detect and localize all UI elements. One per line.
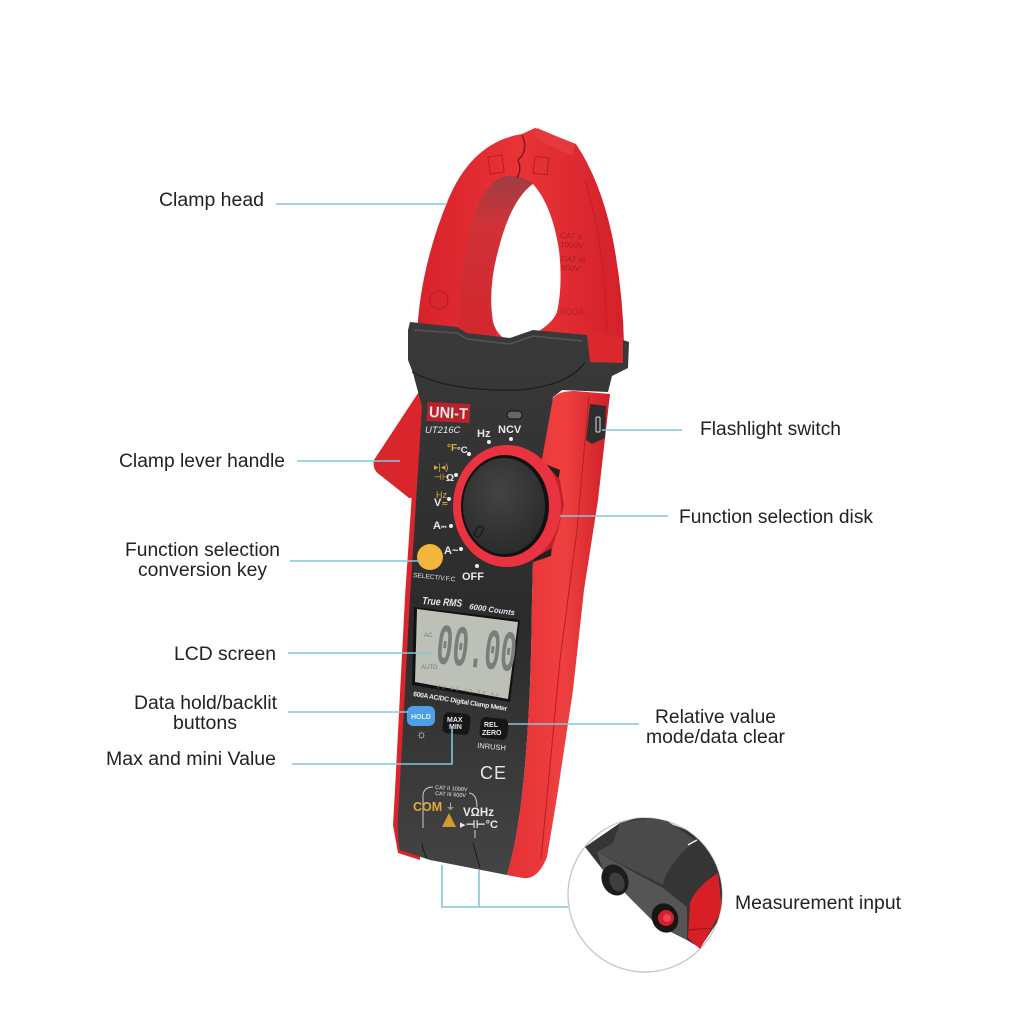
brand logo: UNI-T <box>429 404 469 423</box>
LCD screen <box>412 607 520 702</box>
clamp head jaws <box>417 128 624 362</box>
LCD screen: AUTO <box>421 665 438 671</box>
leader line: relative value <box>508 723 639 725</box>
label: max and mini value: Max and mini Value <box>106 749 276 770</box>
jaw markings: CAT II <box>560 231 582 242</box>
label: data hold backlit buttons: Data hold/backlit <box>134 693 278 714</box>
dial labels: V≂ <box>434 497 448 509</box>
label: function selection conversion key: conversion key <box>138 560 268 581</box>
model label: UT216C <box>425 425 461 436</box>
leader line: max min <box>292 728 452 764</box>
label: measurement input: Measurement input <box>735 893 902 914</box>
leader line: clamp head <box>276 203 447 205</box>
label: clamp lever handle: Clamp lever handle <box>119 451 285 472</box>
max min button: MAX <box>447 717 463 724</box>
dial labels: Hz <box>436 490 447 500</box>
LCD screen: AC <box>424 633 433 639</box>
input labels: CAT II 1000V <box>435 785 468 793</box>
flashlight switch <box>586 404 606 444</box>
label: function selection disk: Function selection disk <box>679 507 873 528</box>
inset: measurement input closeup <box>568 815 722 972</box>
display header: 6000 Counts <box>469 602 516 617</box>
dial labels: A~ <box>444 545 459 557</box>
label: data hold backlit buttons: buttons <box>173 713 237 734</box>
dial labels: °F <box>447 443 457 454</box>
input labels <box>413 785 498 838</box>
hold button <box>407 706 435 741</box>
inset circle <box>568 818 722 972</box>
jaw markings: 1000V <box>560 240 584 251</box>
label: function selection conversion key <box>125 540 280 581</box>
input labels: VΩHz <box>463 807 494 819</box>
label: clamp head: Clamp head <box>159 190 264 211</box>
label: function selection conversion key: Function selection <box>125 540 280 561</box>
input labels: CAT III 600V <box>435 791 467 799</box>
clamp meter <box>374 128 629 878</box>
red side of body <box>507 391 610 878</box>
leader line: function selection disk <box>560 515 668 517</box>
rel zero button: REL <box>484 722 499 729</box>
function selection disk <box>453 445 564 567</box>
inset jack view <box>585 815 722 949</box>
right jaw base <box>588 330 626 364</box>
leader line: hold button <box>288 711 408 713</box>
rel zero button <box>477 717 509 752</box>
leader line: measurement input <box>442 865 568 907</box>
rel zero button: ZERO <box>482 730 502 737</box>
dial labels: A⎓ <box>433 520 447 532</box>
dial dots <box>447 437 513 568</box>
clamp lever handle <box>374 384 424 498</box>
dial labels: NCV <box>498 424 522 436</box>
dial labels: °C <box>457 445 468 456</box>
label: data hold backlit buttons <box>134 693 278 734</box>
leader line: conversion key <box>290 560 420 562</box>
function selection conversion key: SELECT/V.F.C <box>413 572 456 583</box>
leader line: flashlight switch <box>602 429 682 431</box>
function selection conversion key <box>413 544 456 583</box>
dial labels: Ω <box>446 473 454 484</box>
black housing <box>398 322 629 875</box>
dial shadow notches <box>533 462 560 562</box>
clamp meter: 00.00 <box>433 616 519 689</box>
leader line: clamp lever handle <box>297 460 400 462</box>
meter name: 600A AC/DC Digital Clamp Meter <box>413 691 508 713</box>
max min button <box>442 712 471 735</box>
leader line: LCD screen <box>288 652 432 654</box>
jaw markings: 600A <box>560 306 585 318</box>
input labels: COM <box>413 800 442 814</box>
input labels: ⏚ <box>446 802 455 812</box>
dial labels <box>433 424 522 583</box>
jaw markings: 600V <box>561 263 581 273</box>
dial labels: Hz <box>477 428 491 440</box>
hold button: HOLD <box>411 714 431 721</box>
lower seams <box>422 843 480 868</box>
hold button: ☼ <box>416 727 427 741</box>
label: relative value mode: mode/data clear <box>646 727 786 748</box>
LCD screen: 20 30 40 50 60 <box>437 684 499 699</box>
max min button: MIN <box>449 724 462 731</box>
display header: True RMS <box>422 595 463 610</box>
collar highlight <box>414 330 582 344</box>
rel zero button: INRUSH <box>477 741 506 752</box>
dial labels: OFF <box>462 571 484 583</box>
input labels: ▸⊣⊢°C <box>460 819 498 831</box>
dial labels: ⊣⊢ <box>434 472 450 482</box>
jaw markings <box>560 231 586 318</box>
indicator LED <box>507 411 522 419</box>
CE mark: CE <box>480 763 507 783</box>
jaw markings: CAT III <box>561 254 586 265</box>
label: relative value mode: Relative value <box>655 707 776 728</box>
display header <box>422 595 516 617</box>
dial labels: ▸|◂) <box>434 462 448 472</box>
label: flashlight switch: Flashlight switch <box>700 419 841 440</box>
label: relative value mode <box>646 707 786 748</box>
label: LCD screen: LCD screen <box>174 644 276 665</box>
red left strip of body <box>393 388 430 860</box>
